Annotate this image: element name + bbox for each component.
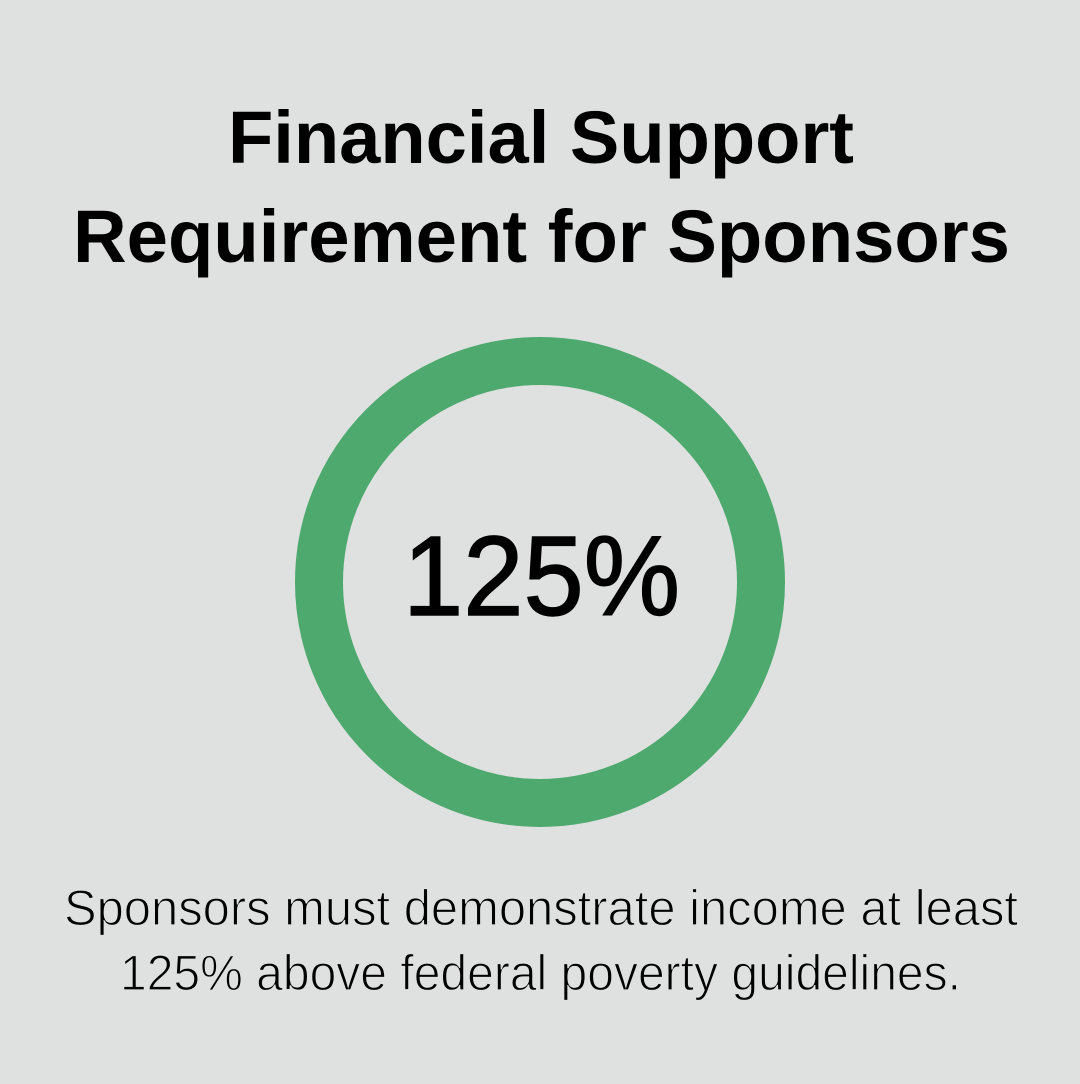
description text <box>64 880 1018 1001</box>
description text: 125% above federal poverty guidelines. <box>120 945 961 1001</box>
description text: Sponsors must demonstrate income at least <box>64 880 1018 936</box>
donut ring chart <box>319 361 761 803</box>
title: Financial Support <box>228 96 854 179</box>
centre value: 125% <box>403 513 680 639</box>
title: Requirement for Sponsors <box>73 195 1010 278</box>
title <box>73 96 1010 278</box>
